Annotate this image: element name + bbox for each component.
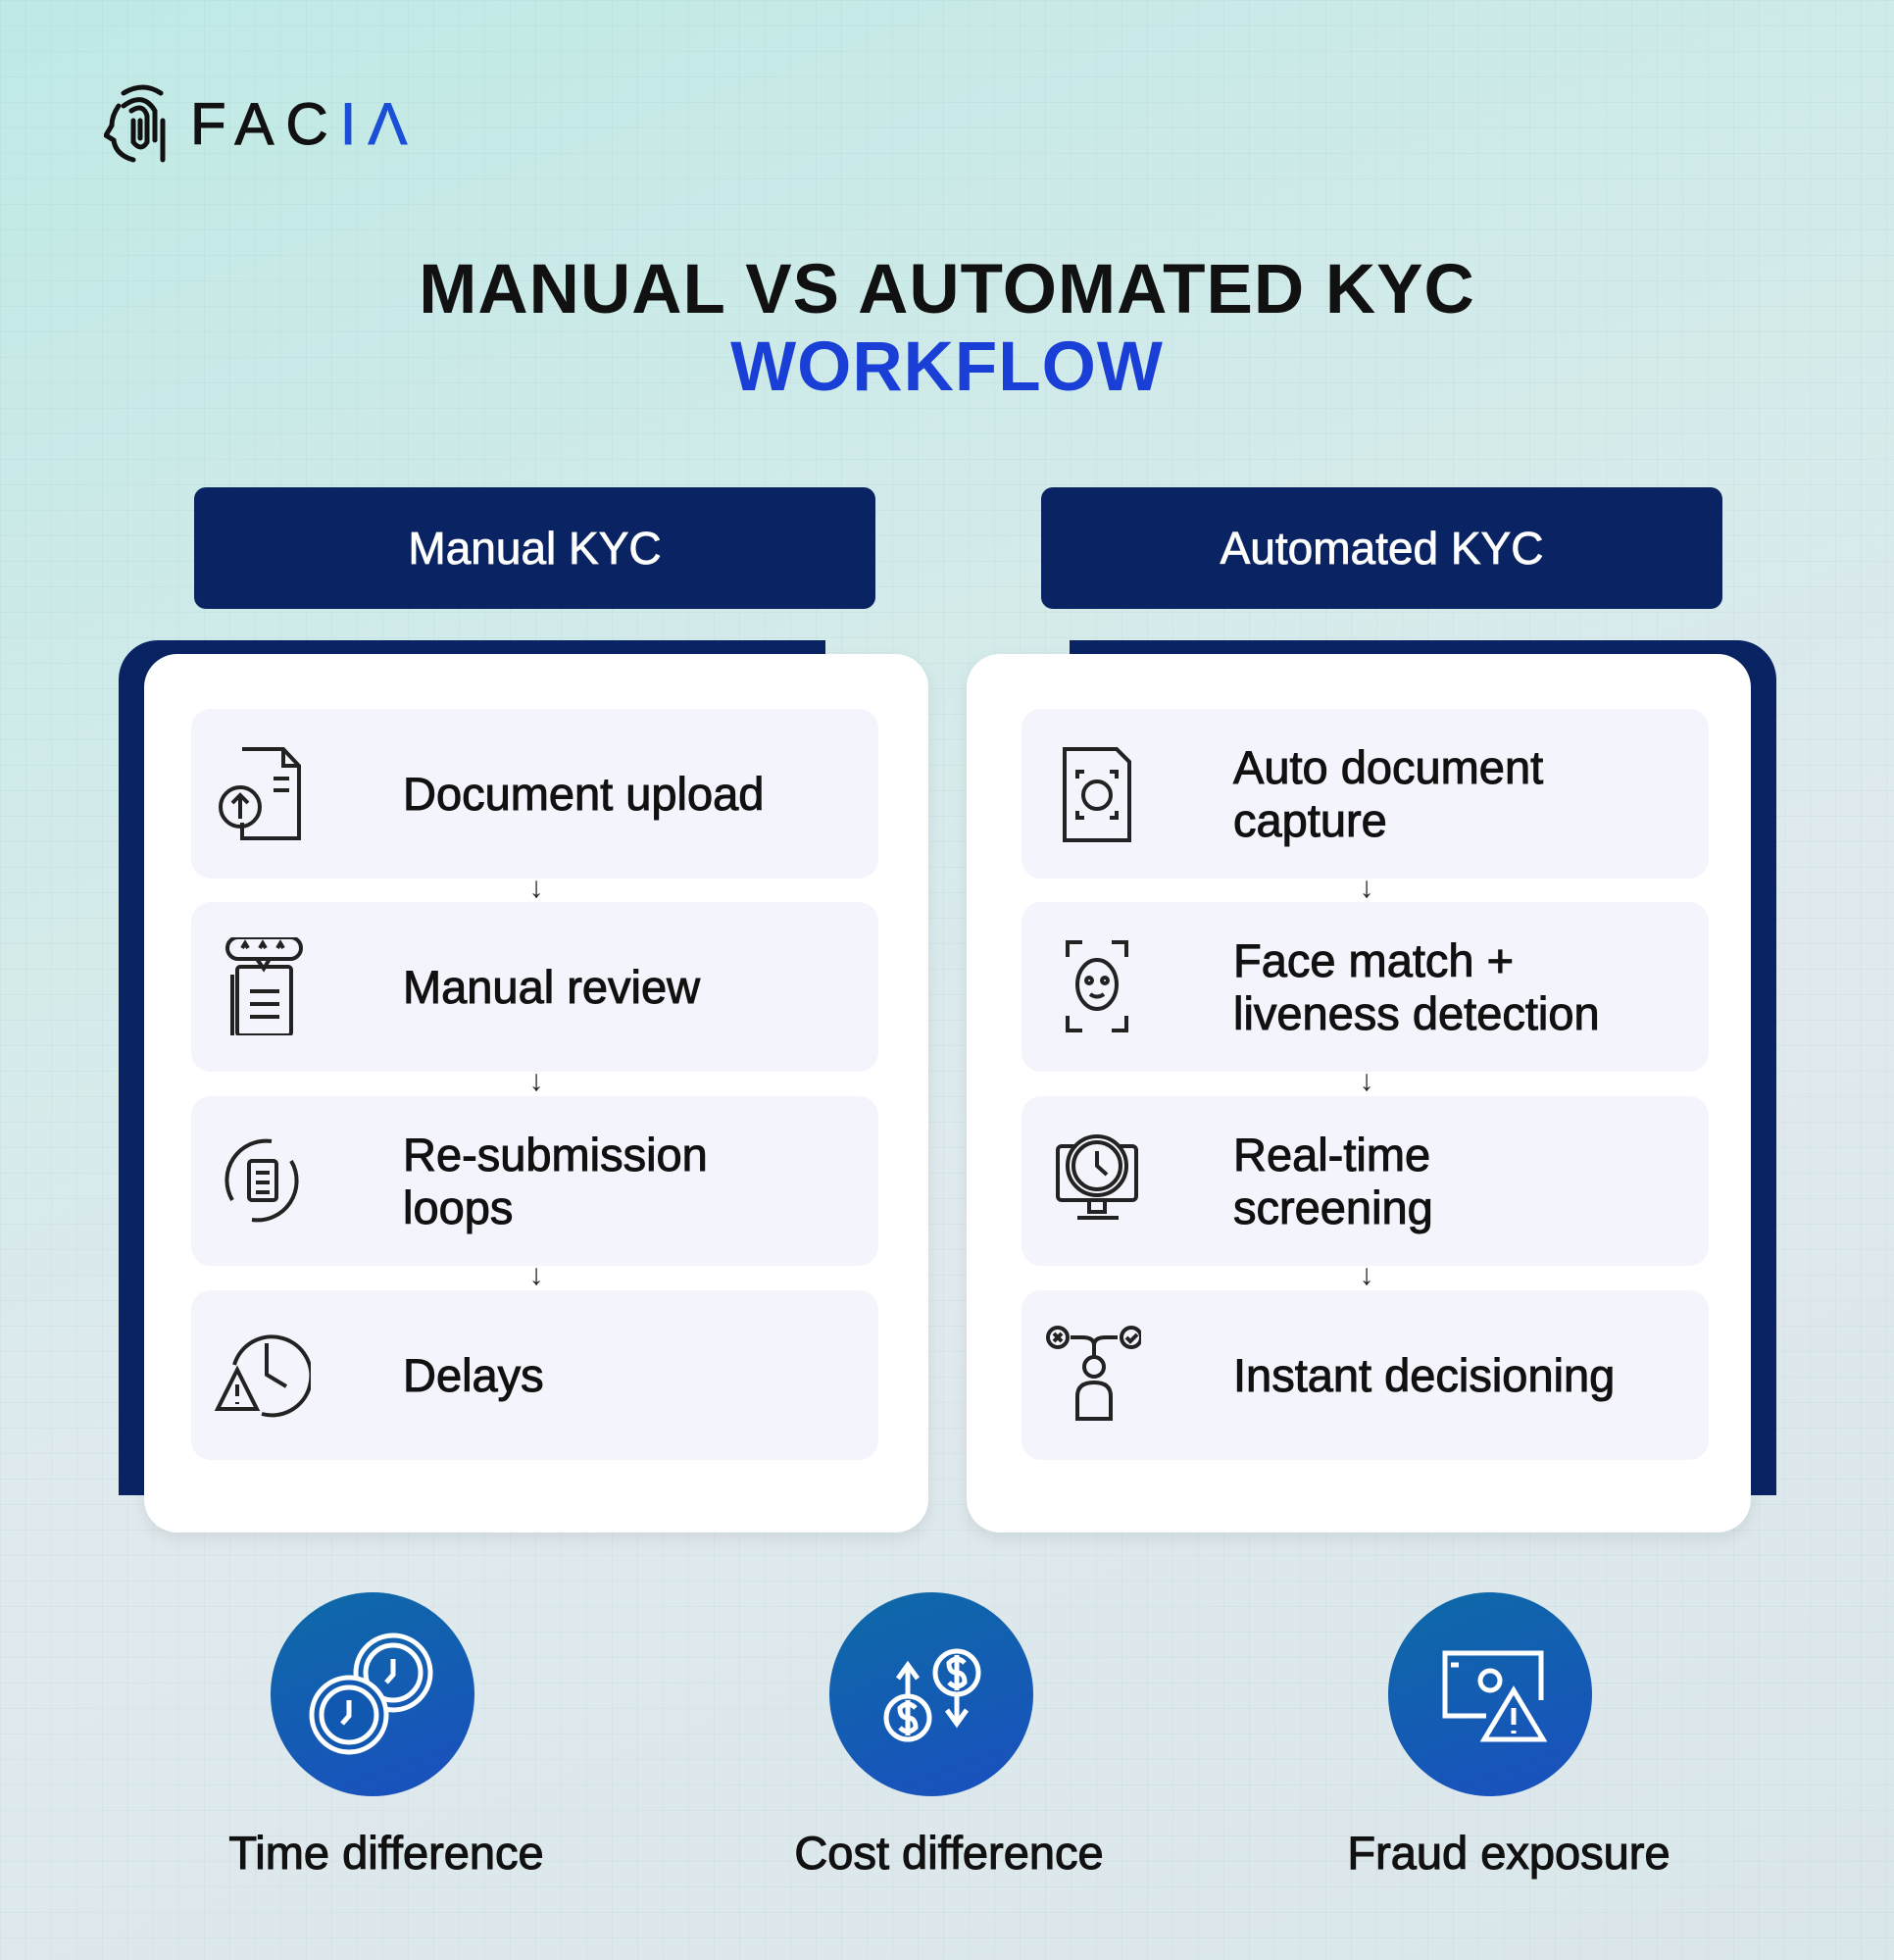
- step: instant decisioning: [1022, 1290, 1709, 1460]
- header: manual: Manual KYC: [408, 523, 662, 574]
- step: auto document capture: [1022, 709, 1709, 879]
- step: auto document capture: capture: [1233, 794, 1387, 845]
- header: manual: [194, 487, 875, 609]
- header: automated: Automated KYC: [1221, 523, 1543, 574]
- panel: manual KYC: [144, 654, 928, 1533]
- logo: [104, 84, 419, 163]
- step: face match: Face match +: [1233, 933, 1514, 986]
- icon: cost difference: [829, 1592, 1033, 1796]
- step: real-time screening: Real-time: [1233, 1128, 1430, 1181]
- step: delays: [191, 1290, 878, 1460]
- icon: fraud exposure: [1388, 1592, 1592, 1796]
- panel: automated KYC: ↓: [1359, 872, 1374, 904]
- step: document upload: Document upload: [403, 767, 764, 820]
- label: time difference: Time difference: [228, 1827, 544, 1879]
- step: manual review: Manual review: [403, 961, 700, 1012]
- step: manual review: [191, 902, 878, 1072]
- step: face match: liveness detection: [1233, 986, 1600, 1039]
- step: resubmission loops: [191, 1096, 878, 1266]
- icon: time difference: [271, 1592, 474, 1796]
- step: face match: [1022, 902, 1709, 1072]
- step: delays: Delays: [403, 1349, 544, 1400]
- title: MANUAL VS AUTOMATED KYC: [419, 251, 1475, 328]
- logo: FACIΛ: [190, 91, 419, 157]
- step: document upload: [191, 709, 878, 879]
- panel: manual KYC: ↓: [529, 1259, 543, 1291]
- header: automated: [1041, 487, 1722, 609]
- step: instant decisioning: Instant decisioning: [1233, 1349, 1615, 1400]
- step: auto document capture: Auto document: [1233, 741, 1543, 792]
- step: real-time screening: screening: [1233, 1181, 1433, 1233]
- label: cost difference: Cost difference: [794, 1827, 1104, 1879]
- step: real-time screening: [1022, 1096, 1709, 1266]
- subtitle: WORKFLOW: [730, 328, 1164, 406]
- step: resubmission loops: Re-submission: [403, 1128, 708, 1181]
- step: resubmission loops: loops: [403, 1181, 513, 1233]
- arrow: ↓: [529, 872, 543, 904]
- label: fraud exposure: Fraud exposure: [1347, 1827, 1670, 1879]
- panel: automated KYC: ↓: [1359, 1065, 1374, 1097]
- panel: automated KYC: [967, 654, 1751, 1533]
- panel: manual KYC: ↓: [529, 1065, 543, 1097]
- panel: automated KYC: ↓: [1359, 1259, 1374, 1291]
